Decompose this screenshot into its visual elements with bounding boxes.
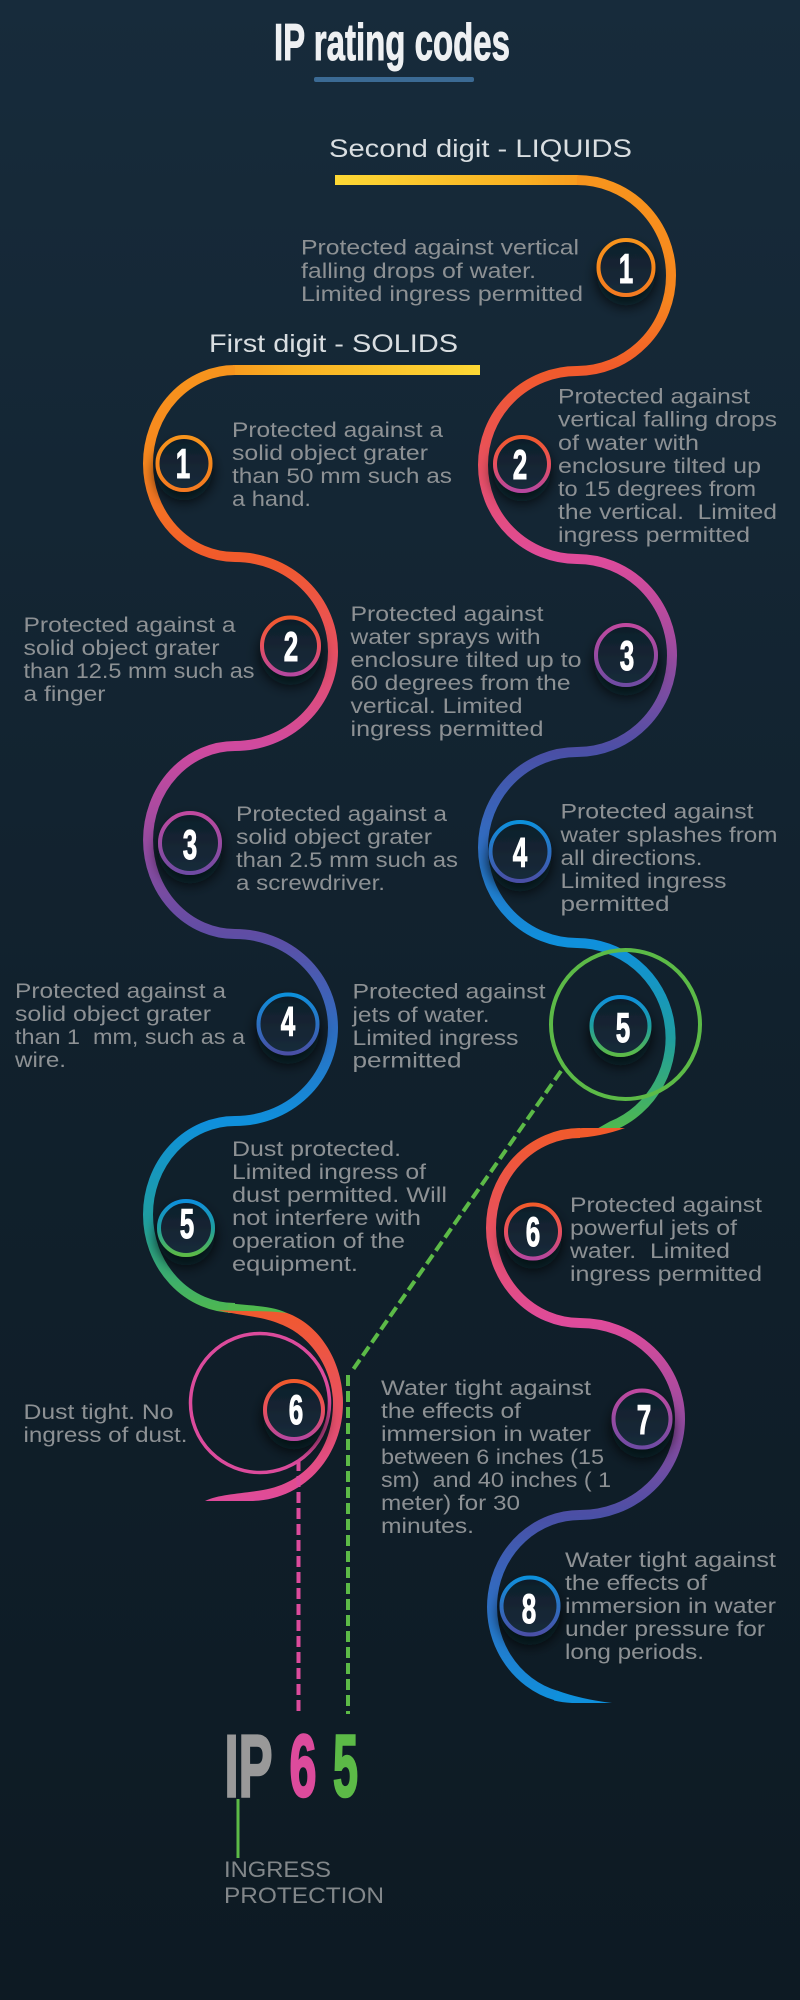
badge: liquids 2: 2	[513, 442, 527, 489]
solids item 3	[160, 803, 458, 895]
text: solids 2	[24, 614, 254, 706]
text: solids 2: solid object grater	[24, 637, 220, 660]
text: solids 3: solid object grater	[236, 826, 432, 849]
text: liquids 6: Protected against	[570, 1194, 762, 1217]
badge: solids 4	[258, 994, 318, 1054]
text: liquids 7	[381, 1377, 611, 1538]
text: solids 4: wire.	[14, 1049, 66, 1072]
text: liquids 8: long periods.	[565, 1641, 704, 1664]
text: solids 3: than 2.5 mm such as	[236, 849, 458, 872]
ribbon: liquids lower	[491, 1128, 680, 1703]
badge: liquids 6	[506, 1204, 560, 1258]
text: liquids 4: water splashes from	[559, 824, 778, 847]
badge: solids 4: 4	[281, 999, 296, 1046]
connector: IP to ingress protection	[236, 1799, 240, 1858]
text: solids 5: Limited ingress of	[232, 1161, 426, 1184]
text: liquids 3: Protected against	[350, 603, 544, 626]
badge: liquids 4: 4	[513, 830, 528, 877]
solids item 5	[159, 1138, 447, 1276]
text: liquids 1	[301, 236, 583, 306]
text: solids 4: Protected against a	[15, 980, 226, 1003]
solids item 4	[14, 980, 318, 1072]
ribbon: solids upper	[148, 370, 480, 1313]
text: liquids 2: Protected against	[558, 386, 750, 408]
badge: liquids 6: 6	[526, 1209, 540, 1256]
text: solids 6: Dust tight. No	[24, 1401, 174, 1424]
solids item 2	[24, 614, 319, 706]
text: solids 1: Protected against a	[232, 419, 443, 442]
badge: liquids 8	[502, 1578, 558, 1634]
text: liquids 8: under pressure for	[565, 1618, 765, 1641]
badge: solids 3	[160, 813, 220, 873]
text: liquids 4: permitted	[560, 893, 670, 916]
text: liquids 2: ingress permitted	[558, 524, 750, 547]
text: liquids 8: immersion in water	[565, 1595, 776, 1618]
text: liquids 4: Limited ingress	[560, 870, 726, 893]
text: liquids 5: Limited ingress	[352, 1027, 518, 1050]
text: solids 1: a hand.	[232, 488, 311, 511]
badge: solids 1	[158, 437, 210, 490]
label: ingress protection	[224, 1857, 384, 1908]
solids item 6	[24, 1381, 323, 1447]
text: liquids 6: water. Limited	[569, 1240, 730, 1263]
text: solids 4: than 1 mm, such as a	[15, 1026, 245, 1049]
badge: liquids 7	[614, 1390, 670, 1448]
text: liquids 2: the vertical. Limited	[558, 501, 777, 524]
text: liquids 4: all directions.	[560, 847, 702, 870]
liquids item 8	[502, 1549, 776, 1664]
text: liquids 2: to 15 degrees from	[558, 478, 756, 501]
text: liquids 5: Protected against	[352, 980, 546, 1004]
text: solids 3: a screwdriver.	[236, 872, 385, 895]
badge: solids 3: 3	[183, 822, 197, 869]
badge: liquids 7: 7	[637, 1397, 651, 1444]
text: liquids 7: meter) for 30	[381, 1492, 520, 1515]
badge: solids 6	[265, 1381, 323, 1439]
label: ingress protection: INGRESS	[224, 1857, 331, 1882]
title underline	[314, 77, 474, 82]
text: liquids 4	[559, 800, 778, 916]
text: liquids 6: powerful jets of	[570, 1217, 737, 1240]
dashed line: digit 6 to code	[296, 1460, 300, 1714]
liquids item 5	[351, 980, 650, 1072]
badge: solids 1: 1	[176, 441, 190, 488]
text: liquids 5: jets of water.	[351, 1004, 490, 1027]
solids item 1	[158, 419, 452, 511]
text: solids 2: a finger	[24, 683, 106, 706]
callout ring: second digit 5 highlight	[551, 950, 700, 1099]
text: solids 3: Protected against a	[236, 803, 447, 826]
ribbon: liquids upper	[335, 180, 672, 1134]
text: solids 4: solid object grater	[15, 1003, 211, 1026]
liquids item 7	[381, 1377, 670, 1538]
badge: liquids 1: 1	[619, 246, 633, 293]
heading: first digit solids: First digit - SOLIDS	[209, 330, 458, 358]
text: liquids 6: ingress permitted	[570, 1263, 762, 1286]
badge: solids 6: 6	[289, 1387, 303, 1434]
text: solids 5: not interfere with	[232, 1207, 421, 1230]
label: ingress protection: PROTECTION	[224, 1883, 384, 1908]
text: liquids 7: between 6 inches (15	[381, 1446, 604, 1469]
text: solids 3	[236, 803, 458, 895]
code: IP 65	[224, 1716, 358, 1816]
text: liquids 5	[351, 980, 546, 1072]
text: liquids 7: immersion in water	[381, 1423, 591, 1446]
text: liquids 3: ingress permitted	[350, 718, 544, 741]
text: solids 6: ingress of dust.	[24, 1424, 188, 1447]
text: liquids 6	[569, 1194, 762, 1286]
text: solids 5: operation of the	[232, 1230, 405, 1253]
badge: liquids 3	[596, 625, 656, 685]
ribbon: solids lower to digit 6	[205, 1310, 343, 1501]
text: solids 5	[232, 1138, 447, 1276]
dashed line: digit 5 to code	[348, 1071, 561, 1714]
text: solids 1: solid object grater	[232, 442, 428, 465]
text: liquids 3: enclosure tilted up to	[350, 649, 582, 672]
badge: liquids 4	[490, 822, 550, 881]
text: liquids 2	[558, 386, 777, 547]
code: IP 65: IP	[224, 1716, 272, 1816]
text: liquids 7: Water tight against	[381, 1377, 591, 1400]
text: liquids 8: Water tight against	[565, 1549, 776, 1572]
badge: liquids 5	[592, 997, 650, 1055]
text: solids 6	[24, 1401, 188, 1447]
text: liquids 3: vertical. Limited	[350, 695, 522, 718]
badge: liquids 1	[598, 240, 654, 295]
badge: solids 2: 2	[284, 624, 298, 671]
text: liquids 1: Limited ingress permitted	[301, 283, 583, 306]
text: solids 5: equipment.	[232, 1253, 358, 1276]
text: liquids 8: the effects of	[565, 1572, 707, 1595]
badge: solids 5	[159, 1201, 213, 1255]
text: liquids 5: permitted	[352, 1050, 462, 1072]
liquids item 1	[301, 236, 654, 306]
text: liquids 8	[565, 1549, 776, 1664]
code: IP 65: 6	[290, 1716, 316, 1815]
text: liquids 3: water sprays with	[349, 626, 540, 649]
badge: liquids 3: 3	[620, 633, 634, 680]
text: solids 1: than 50 mm such as	[232, 465, 452, 488]
text: liquids 4: Protected against	[560, 800, 754, 824]
badge: liquids 5: 5	[616, 1005, 630, 1052]
heading: second digit liquids: Second digit - LIQUIDS	[329, 135, 632, 163]
liquids item 2	[495, 386, 777, 547]
badge: liquids 8: 8	[522, 1586, 536, 1633]
text: solids 2: Protected against a	[24, 614, 236, 637]
text: liquids 2: vertical falling drops	[558, 408, 777, 432]
text: liquids 1: falling drops of water.	[301, 260, 536, 283]
callout ring: first digit 6 highlight	[190, 1334, 330, 1472]
text: solids 5: dust permitted. Will	[232, 1184, 447, 1207]
text: liquids 2: enclosure tilted up	[558, 455, 761, 478]
code: IP 65: 5	[333, 1716, 358, 1815]
text: liquids 7: sm) and 40 inches ( 1	[381, 1469, 611, 1492]
text: liquids 1: Protected against vertical	[301, 236, 579, 260]
text: liquids 3	[349, 603, 582, 741]
badge: solids 5: 5	[180, 1201, 194, 1248]
text: solids 2: than 12.5 mm such as	[24, 660, 254, 683]
badge: liquids 2	[495, 437, 549, 491]
text: solids 4	[14, 980, 245, 1072]
text: liquids 3: 60 degrees from the	[350, 672, 570, 695]
text: solids 5: Dust protected.	[232, 1138, 401, 1161]
liquids item 4	[490, 800, 778, 916]
text: liquids 7: the effects of	[381, 1400, 521, 1423]
text: liquids 2: of water with	[558, 432, 699, 455]
liquids item 6	[506, 1194, 762, 1286]
text: solids 1	[232, 419, 452, 511]
badge: solids 2	[262, 618, 319, 674]
liquids item 3	[349, 603, 656, 741]
text: liquids 7: minutes.	[381, 1515, 474, 1538]
title: IP rating codes	[274, 14, 510, 72]
